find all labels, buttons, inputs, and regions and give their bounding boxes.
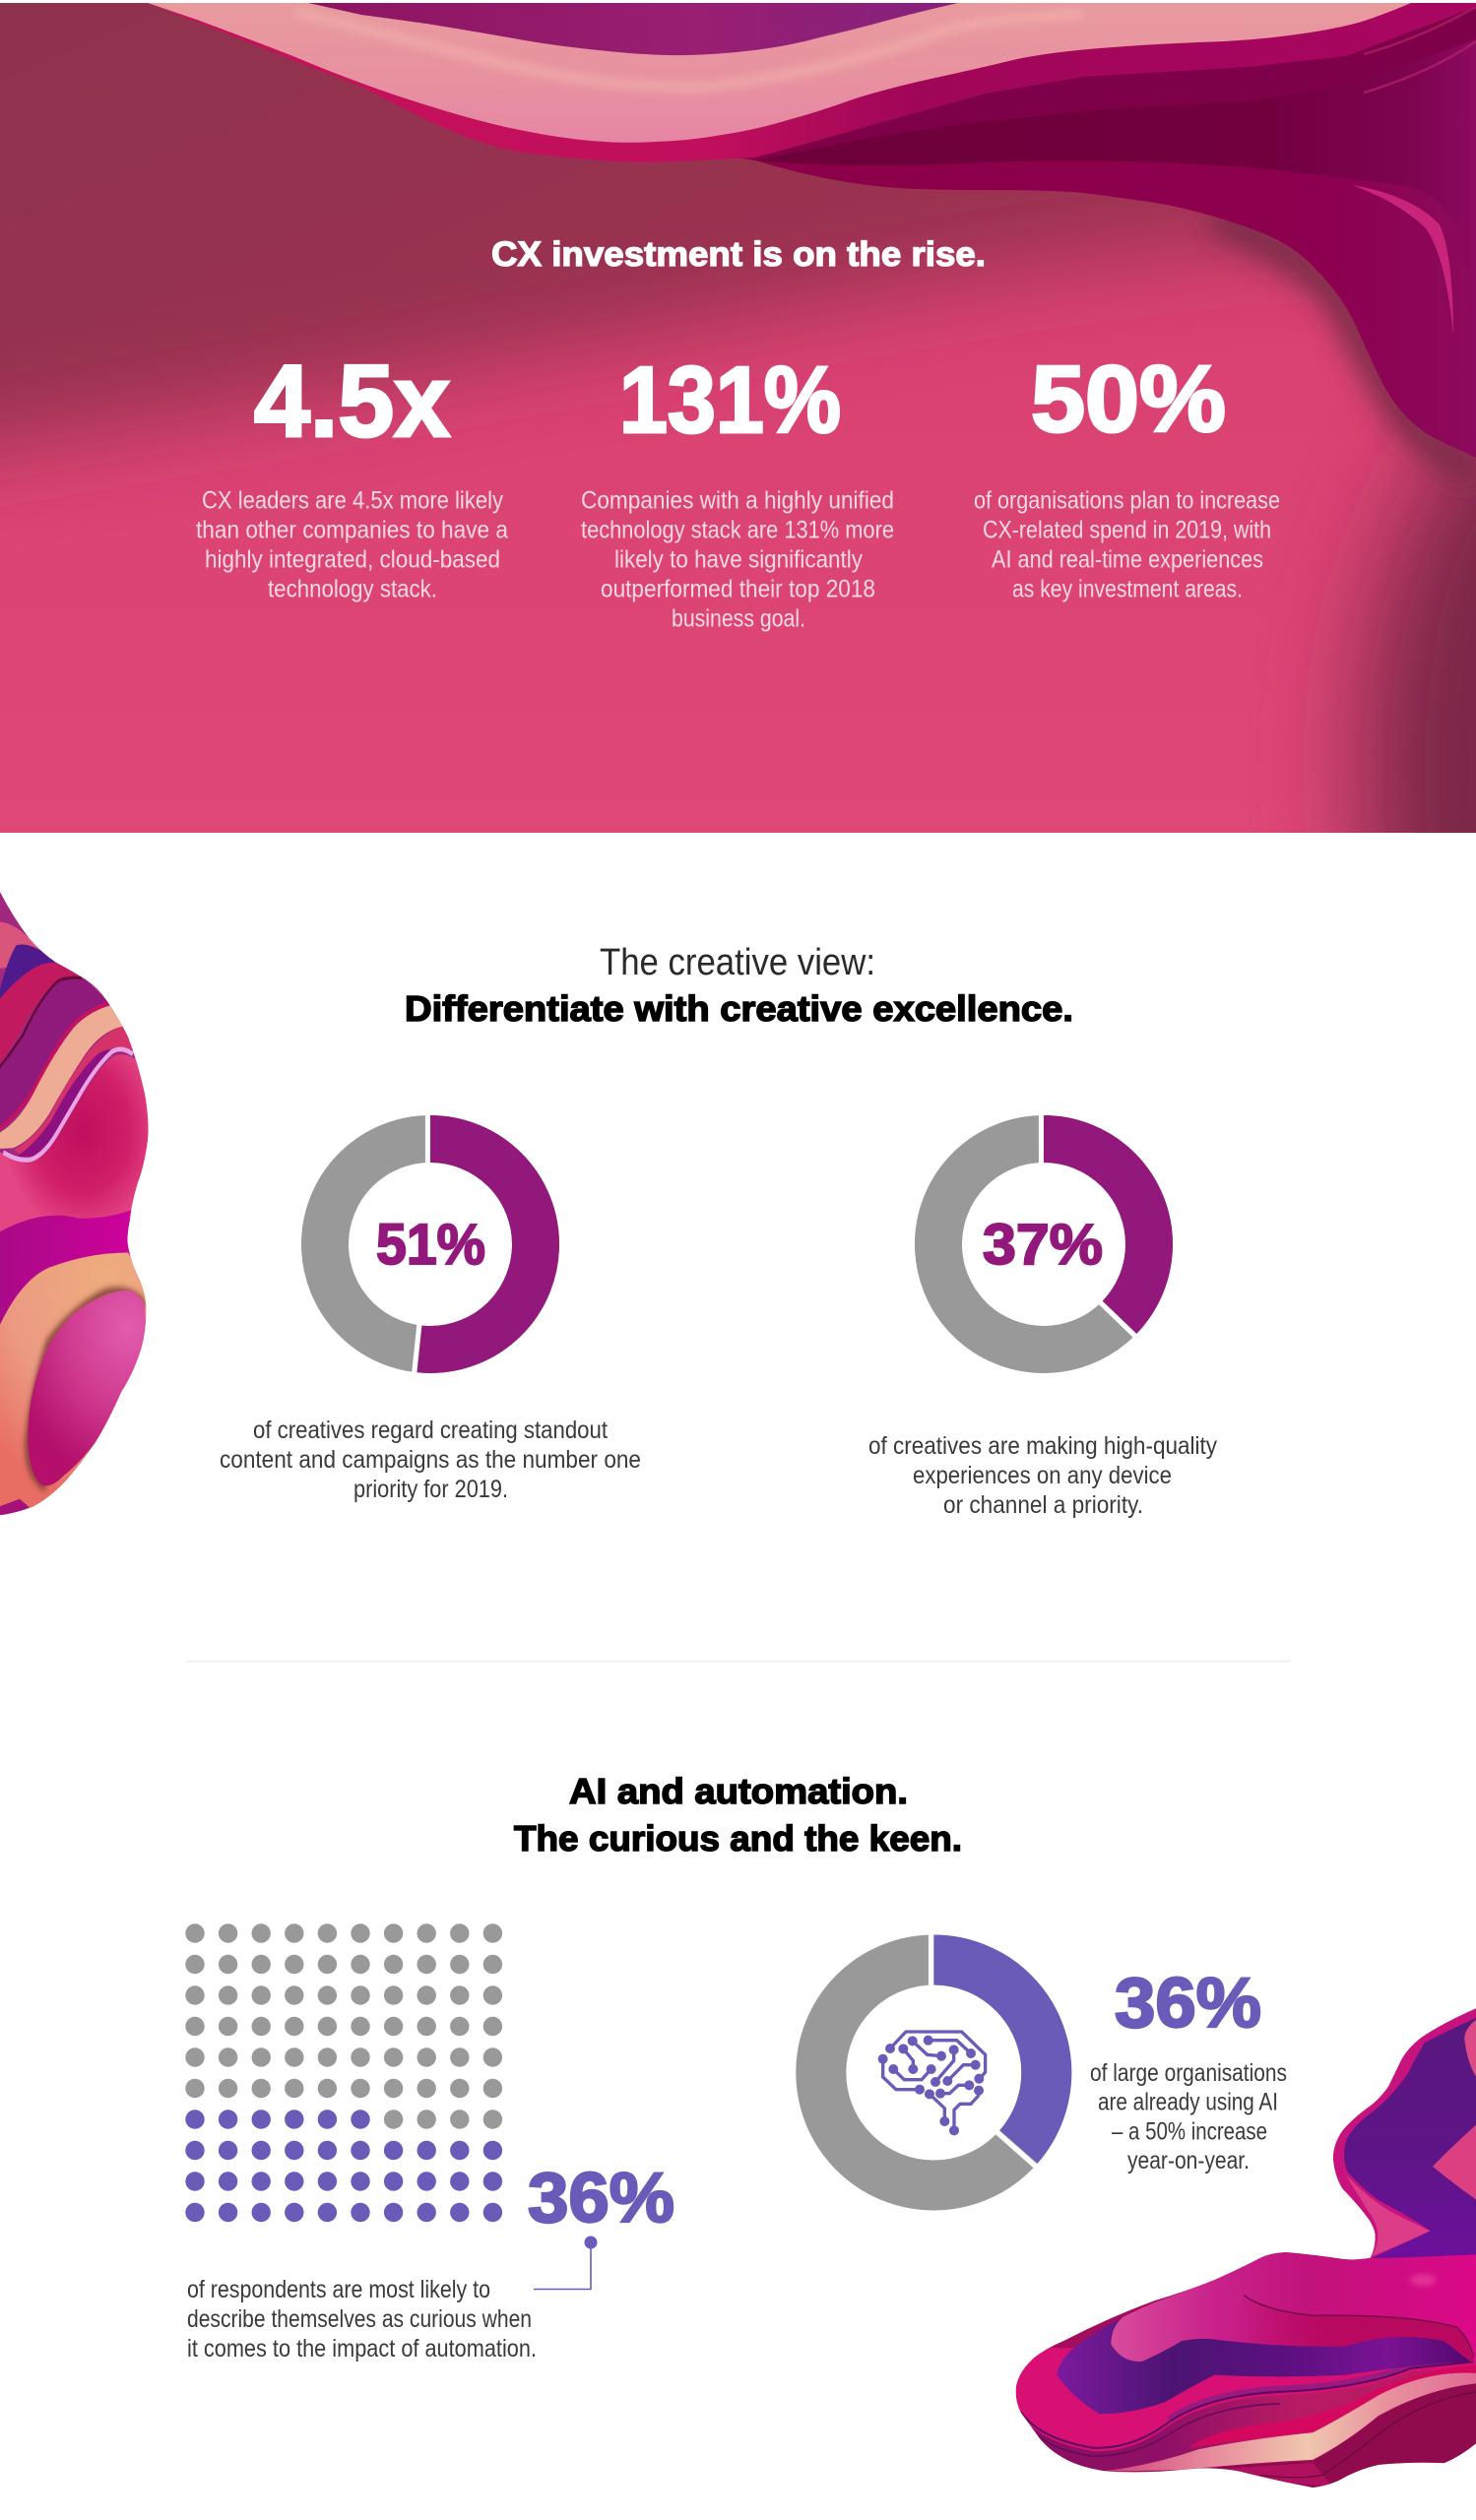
donut chart: 37% xyxy=(938,1112,1149,1350)
stat column: 131%: likely to have significantly xyxy=(614,545,863,573)
donut chart: 37%: 37% xyxy=(983,1213,1103,1277)
heading: CX investment: CX investment is on the rise. xyxy=(491,235,986,274)
caption: large organisations: year-on-year. xyxy=(1127,2147,1250,2174)
caption: 51% of creatives: priority for 2019. xyxy=(353,1476,508,1503)
stat column: 4.5x: highly integrated, cloud-based xyxy=(205,545,500,573)
connector: 36% to caption xyxy=(534,2236,597,2290)
stat column: 50%: 50% xyxy=(1031,346,1226,452)
stat column: 4.5x: CX leaders are 4.5x more likely xyxy=(202,486,503,514)
caption: curious respondents: it comes to the impact of automation. xyxy=(187,2335,537,2362)
caption: 37% of creatives: or channel a priority. xyxy=(943,1491,1143,1519)
caption: 51% of creatives: content and campaigns as the number one xyxy=(220,1446,641,1474)
stat column: 4.5x: than other companies to have a xyxy=(196,516,508,543)
stat column: 4.5x: technology stack. xyxy=(268,575,437,602)
decorative blob: bottom right xyxy=(1016,2008,1476,2488)
heading: AI and automation xyxy=(514,1771,962,1858)
stat column: 50%: as key investment areas. xyxy=(1012,575,1243,602)
caption: 51% of creatives: of creatives regard creating standout xyxy=(253,1417,608,1444)
caption: 51% of creatives xyxy=(220,1417,641,1503)
donut chart: 51% xyxy=(325,1112,536,1375)
stat column: 131%: outperformed their top 2018 xyxy=(601,575,875,602)
stat column: 50% xyxy=(974,346,1280,602)
caption: large organisations: – a 50% increase xyxy=(1112,2118,1267,2146)
caption: curious respondents: describe themselves as curious when xyxy=(187,2305,532,2333)
icon: circuit brain xyxy=(878,2032,986,2135)
stat: 36% using AI: 36% xyxy=(1115,1965,1261,2043)
stat column: 131% xyxy=(581,347,894,632)
heading: creative view: The creative view: xyxy=(600,942,875,983)
decorative blob: left xyxy=(0,866,155,1524)
stat column: 50%: CX-related spend in 2019, with xyxy=(983,516,1271,543)
caption: large organisations: of large organisations xyxy=(1090,2059,1287,2087)
heading: AI and automation: The curious and the keen. xyxy=(514,1818,962,1858)
stat column: 50%: of organisations plan to increase xyxy=(974,486,1280,514)
heading: creative view xyxy=(405,942,1073,1029)
heading: AI and automation: AI and automation. xyxy=(569,1771,908,1811)
stat column: 4.5x xyxy=(196,345,508,602)
caption: curious respondents xyxy=(187,2276,537,2362)
caption: 37% of creatives: of creatives are making high-quality xyxy=(868,1432,1217,1460)
panel: hero background with wave xyxy=(0,3,1476,833)
caption: large organisations: are already using AI xyxy=(1098,2089,1278,2116)
donut chart: 51%: 51% xyxy=(376,1213,485,1277)
caption: 37% of creatives xyxy=(868,1432,1217,1519)
caption: 37% of creatives: experiences on any device xyxy=(913,1462,1172,1489)
stat column: 131%: business goal. xyxy=(672,604,805,632)
heading: creative view: Differentiate with creative excellence. xyxy=(405,988,1073,1029)
caption: curious respondents: of respondents are most likely to xyxy=(187,2276,490,2303)
stat column: 50%: AI and real-time experiences xyxy=(992,545,1263,573)
stat column: 131%: Companies with a highly unified xyxy=(581,486,894,514)
dot matrix chart: 36 of 100 xyxy=(185,1923,502,2222)
caption: large organisations xyxy=(1090,2059,1287,2174)
stat: 36% curious: 36% xyxy=(528,2160,674,2237)
stat column: 4.5x: 4.5x xyxy=(254,345,450,459)
donut chart: 36% with brain icon xyxy=(821,1929,1047,2185)
stat column: 131%: technology stack are 131% more xyxy=(581,516,894,543)
stat column: 131%: 131% xyxy=(619,347,841,453)
